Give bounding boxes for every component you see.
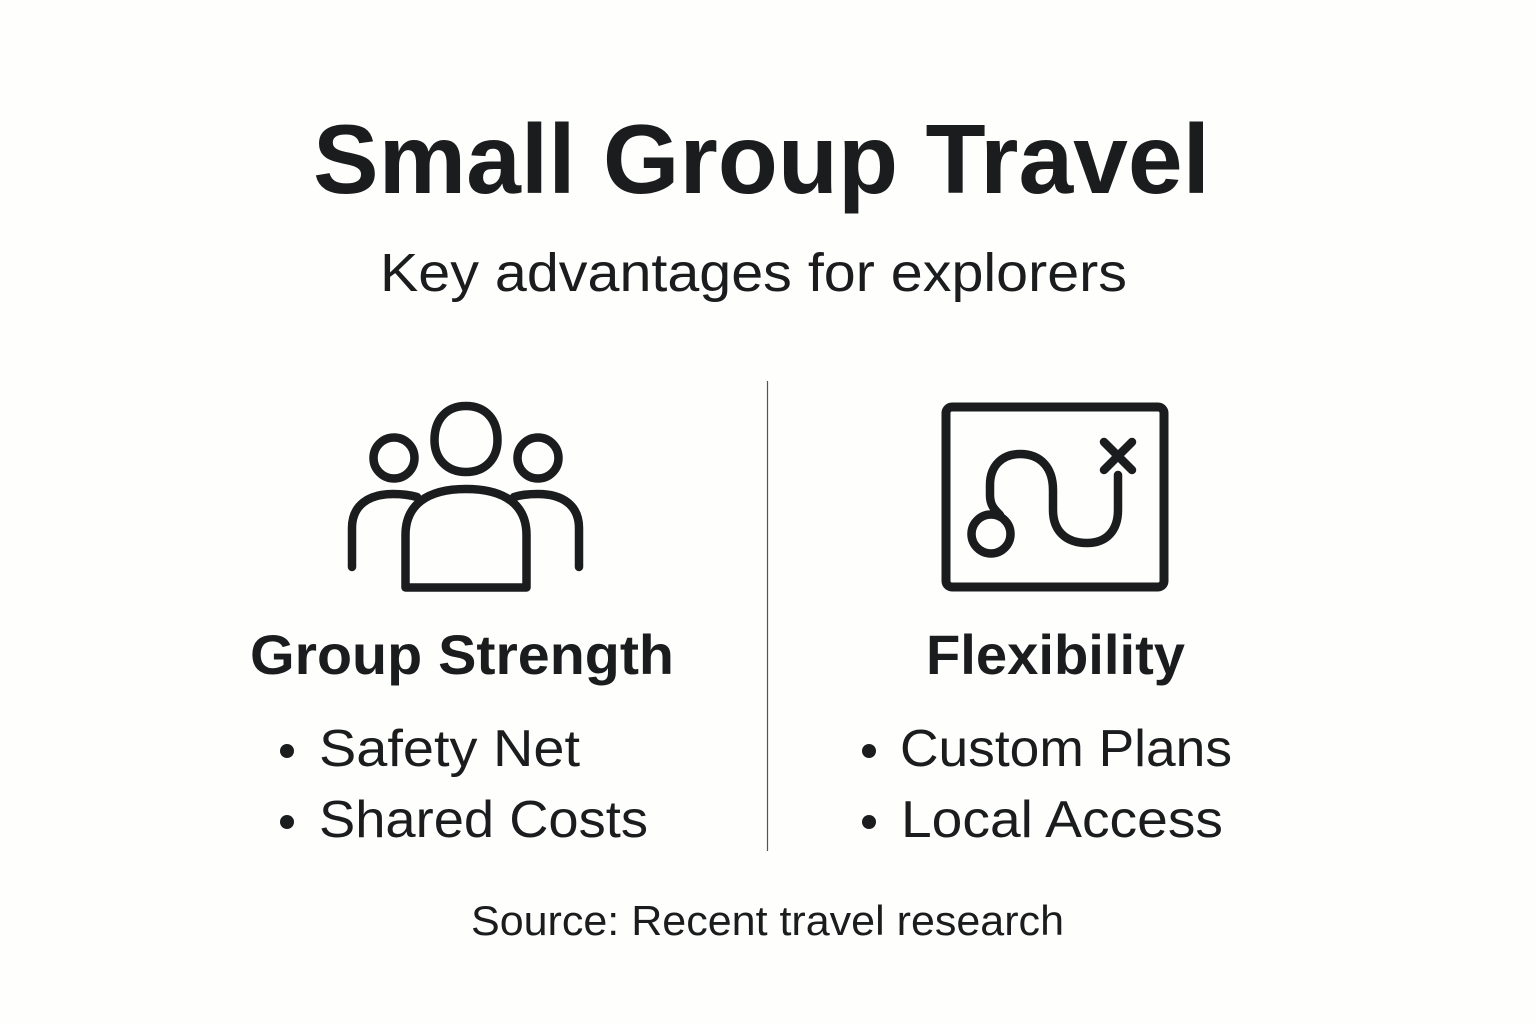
list: group strength benefits: Shared Costs bbox=[319, 791, 648, 849]
list: flexibility benefits: Local Access bbox=[901, 791, 1223, 849]
heading: group strength: Group Strength bbox=[250, 623, 674, 686]
icon: map with route bbox=[946, 407, 1164, 587]
subtitle: Key advantages for explorers bbox=[380, 243, 1127, 303]
source note: Source: Recent travel research bbox=[471, 897, 1064, 944]
list: flexibility benefits: Custom Plans bbox=[900, 720, 1232, 778]
panel: group strength bbox=[250, 406, 674, 849]
list: group strength benefits bbox=[280, 720, 648, 849]
heading: flexibility: Flexibility bbox=[926, 623, 1185, 686]
list: group strength benefits: Safety Net bbox=[319, 720, 581, 778]
list: flexibility benefits bbox=[862, 720, 1232, 849]
icon: group of people bbox=[352, 406, 579, 588]
title: Small Group Travel bbox=[313, 104, 1210, 214]
panel: flexibility bbox=[862, 407, 1232, 849]
